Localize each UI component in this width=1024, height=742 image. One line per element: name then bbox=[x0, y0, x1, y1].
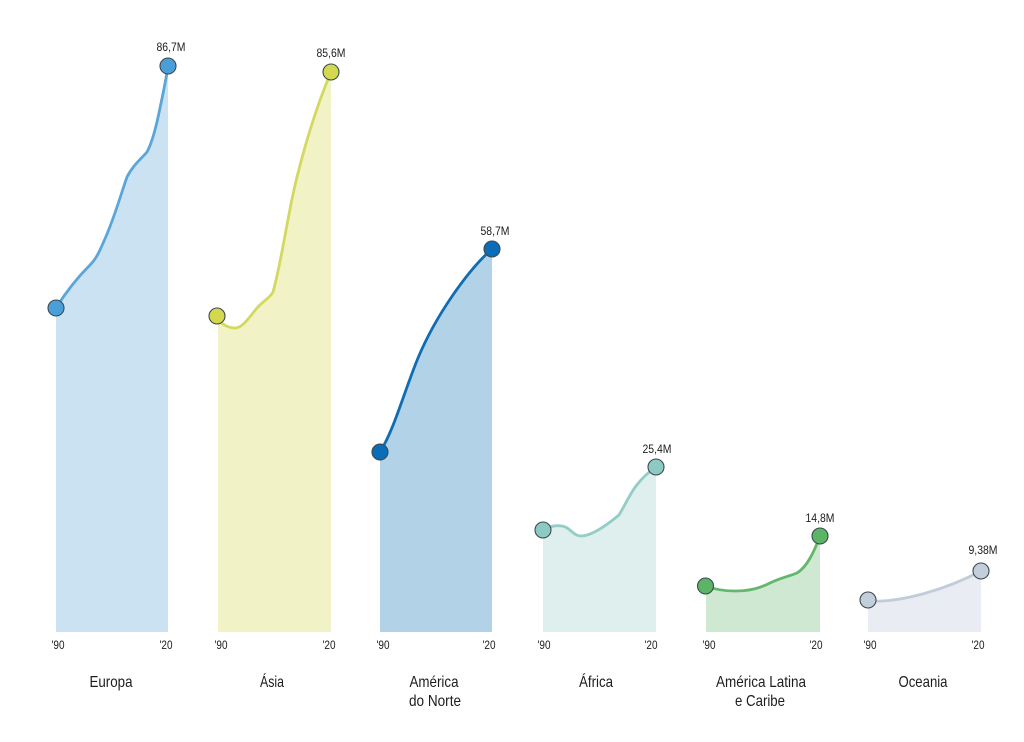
marker: Oceania 1990 bbox=[860, 592, 876, 608]
panel: África bbox=[535, 442, 672, 691]
axis label: Ásia 1990: '90 bbox=[214, 638, 228, 652]
line: Europa bbox=[56, 66, 168, 308]
axis label: Ásia 2020: '20 bbox=[322, 638, 336, 652]
marker: África 1990 bbox=[535, 522, 551, 538]
area: Ásia bbox=[218, 72, 331, 632]
region name: Ásia: Ásia bbox=[260, 672, 284, 691]
panel: América do Norte bbox=[372, 224, 510, 710]
line: África bbox=[543, 467, 656, 536]
region name: América Latina e Caribe: América Latina bbox=[716, 674, 806, 691]
value: Oceania: 9,38M bbox=[968, 543, 998, 557]
axis label: América Latina e Caribe 1990: '90 bbox=[702, 638, 716, 652]
axis label: África 1990: '90 bbox=[538, 638, 551, 652]
panel: Europa bbox=[48, 40, 186, 691]
region name: América do Norte: do Norte bbox=[409, 693, 461, 710]
region name: Europa: Europa bbox=[90, 674, 133, 691]
value: Ásia: 85,6M bbox=[316, 46, 346, 60]
region name: América do Norte: América bbox=[410, 674, 459, 691]
marker: Ásia 1990 bbox=[209, 308, 225, 324]
panel: Ásia bbox=[209, 46, 346, 691]
region name: América do Norte bbox=[409, 674, 461, 710]
axis label: Oceania 1990: '90 bbox=[864, 638, 877, 652]
marker: Ásia 2020 bbox=[323, 64, 339, 80]
marker: América Latina e Caribe 1990 bbox=[698, 578, 714, 594]
marker: Europa 2020 bbox=[160, 58, 176, 74]
value: África: 25,4M bbox=[642, 442, 672, 456]
line: Ásia bbox=[218, 72, 331, 328]
marker: América Latina e Caribe 2020 bbox=[812, 528, 828, 544]
area: América Latina e Caribe bbox=[706, 536, 820, 632]
value: Europa: 86,7M bbox=[156, 40, 186, 54]
marker: América do Norte 1990 bbox=[372, 444, 388, 460]
line: Oceania bbox=[868, 571, 981, 601]
axis label: Europa 1990: '90 bbox=[52, 638, 65, 652]
region name: África: África bbox=[579, 672, 613, 691]
value: América do Norte: 58,7M bbox=[480, 224, 510, 238]
axis label: África 2020: '20 bbox=[644, 638, 658, 652]
panel: Oceania bbox=[860, 543, 998, 691]
marker: Oceania 2020 bbox=[973, 563, 989, 579]
axis label: América do Norte 1990: '90 bbox=[376, 638, 390, 652]
axis label: Oceania 2020: '20 bbox=[972, 638, 985, 652]
region name: Oceania: Oceania bbox=[898, 674, 948, 691]
marker: África 2020 bbox=[648, 459, 664, 475]
area: Europa bbox=[56, 66, 168, 632]
axis label: América do Norte 2020: '20 bbox=[482, 638, 496, 652]
marker: América do Norte 2020 bbox=[484, 241, 500, 257]
marker: Europa 1990 bbox=[48, 300, 64, 316]
axis label: América Latina e Caribe 2020: '20 bbox=[810, 638, 823, 652]
area: América do Norte bbox=[380, 249, 492, 632]
panel: América Latina e Caribe bbox=[698, 511, 834, 710]
axis label: Europa 2020: '20 bbox=[160, 638, 173, 652]
region name: América Latina e Caribe bbox=[716, 674, 806, 710]
line: América Latina e Caribe bbox=[706, 536, 820, 591]
line: América do Norte bbox=[380, 249, 492, 452]
area: Oceania bbox=[868, 571, 981, 632]
area: África bbox=[543, 467, 656, 632]
region name: América Latina e Caribe: e Caribe bbox=[735, 693, 785, 710]
value: América Latina e Caribe: 14,8M bbox=[806, 511, 834, 525]
